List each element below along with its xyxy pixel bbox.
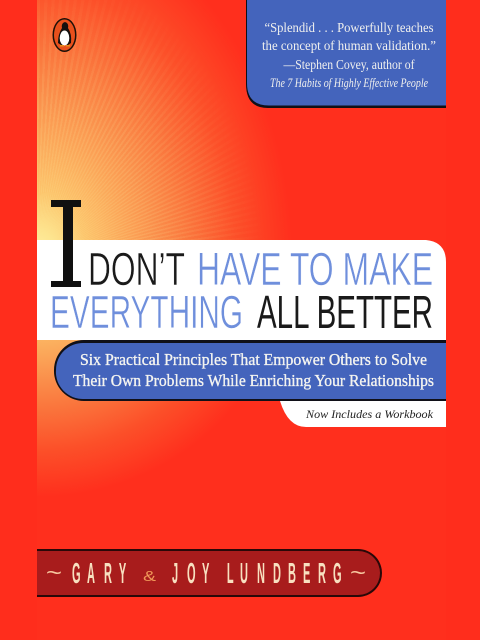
subtitle text: Their Own Problems While Enriching Your Relationships (73, 371, 434, 390)
quote text: —Stephen Covey, author of (283, 57, 415, 72)
subtitle text: Six Practical Principles That Empower Others to Solve (80, 350, 427, 369)
title line 2: EVERYTHING (50, 286, 243, 338)
subtitle text (73, 350, 434, 390)
quote text: the concept of human validation.” (262, 38, 436, 53)
sunburst glow, lower half (37, 262, 446, 522)
author names: GARY (72, 557, 126, 590)
sunburst glow, upper half (37, 0, 446, 262)
panel: workbook tab (280, 401, 446, 427)
panel: blue subtitle band (54, 340, 446, 401)
panel: white title band (37, 240, 446, 340)
title line 1 (88, 243, 433, 295)
quote text: The 7 Habits of Highly Effective People (270, 76, 428, 90)
author names: JOY (172, 557, 210, 590)
icon: penguin logo (52, 18, 76, 52)
author names (46, 557, 366, 590)
quote text: “Splendid . . . Powerfully teaches (264, 20, 434, 35)
panel: author band (37, 549, 382, 597)
author names: ~ (46, 560, 62, 585)
author names: & (143, 568, 156, 585)
workbook note: Now Includes a Workbook (305, 407, 434, 421)
quote text (262, 20, 436, 90)
panel: top quote box (246, 0, 446, 108)
author names: ~ (350, 560, 366, 585)
author names: LUNDBERG (227, 557, 342, 590)
title line 1: DON’T (88, 243, 185, 295)
title (50, 200, 433, 338)
sunburst rays (37, 23, 223, 240)
big letter I (51, 200, 81, 287)
